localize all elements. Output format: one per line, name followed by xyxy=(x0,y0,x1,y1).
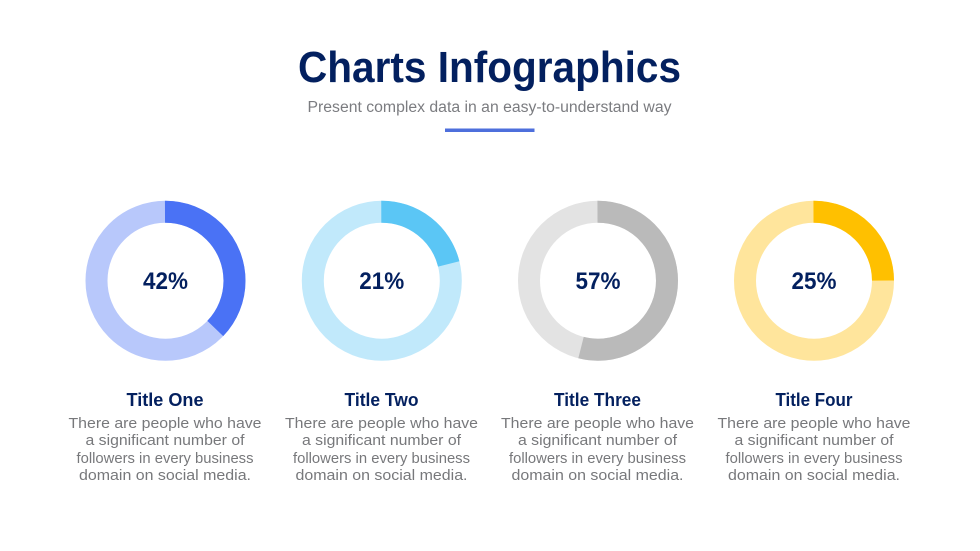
description: followers in every business xyxy=(726,450,902,467)
donut chart: 57% xyxy=(529,212,667,350)
donut chart: 21% xyxy=(313,212,451,350)
description: domain on social media. xyxy=(79,467,251,484)
description: a significant number of xyxy=(86,432,245,449)
heading: Title One xyxy=(126,390,204,410)
description: followers in every business xyxy=(76,450,254,467)
panel: title two xyxy=(285,212,478,484)
description: a significant number of xyxy=(518,432,678,449)
percentage: 42% xyxy=(143,268,188,295)
percentage: 57% xyxy=(576,268,620,295)
description: a significant number of xyxy=(302,432,462,449)
panel: title four xyxy=(718,212,910,484)
description: There are people who have xyxy=(285,415,478,432)
description xyxy=(501,415,694,484)
heading: Title Three xyxy=(554,390,641,410)
description: domain on social media. xyxy=(728,467,900,484)
description: There are people who have xyxy=(501,415,694,432)
heading: Title Two xyxy=(344,390,418,410)
description xyxy=(68,415,262,484)
heading: Title Four xyxy=(776,390,852,410)
description: domain on social media. xyxy=(296,467,468,484)
title: Charts Infographics xyxy=(298,43,681,92)
panel: title one xyxy=(68,212,262,484)
percentage: 25% xyxy=(792,268,836,295)
description xyxy=(285,415,478,484)
description xyxy=(718,415,910,484)
percentage: 21% xyxy=(359,268,404,295)
subtitle: Present complex data in an easy-to-understand way xyxy=(308,99,672,116)
donut chart: 42% xyxy=(96,212,234,350)
description: There are people who have xyxy=(68,415,262,432)
description: domain on social media. xyxy=(512,467,684,484)
donut chart: 25% xyxy=(745,212,883,350)
description: followers in every business xyxy=(509,450,686,467)
description: a significant number of xyxy=(734,432,894,449)
accent underline xyxy=(445,128,534,132)
description: followers in every business xyxy=(293,450,470,467)
description: There are people who have xyxy=(718,415,910,432)
panel: title three xyxy=(501,212,694,484)
